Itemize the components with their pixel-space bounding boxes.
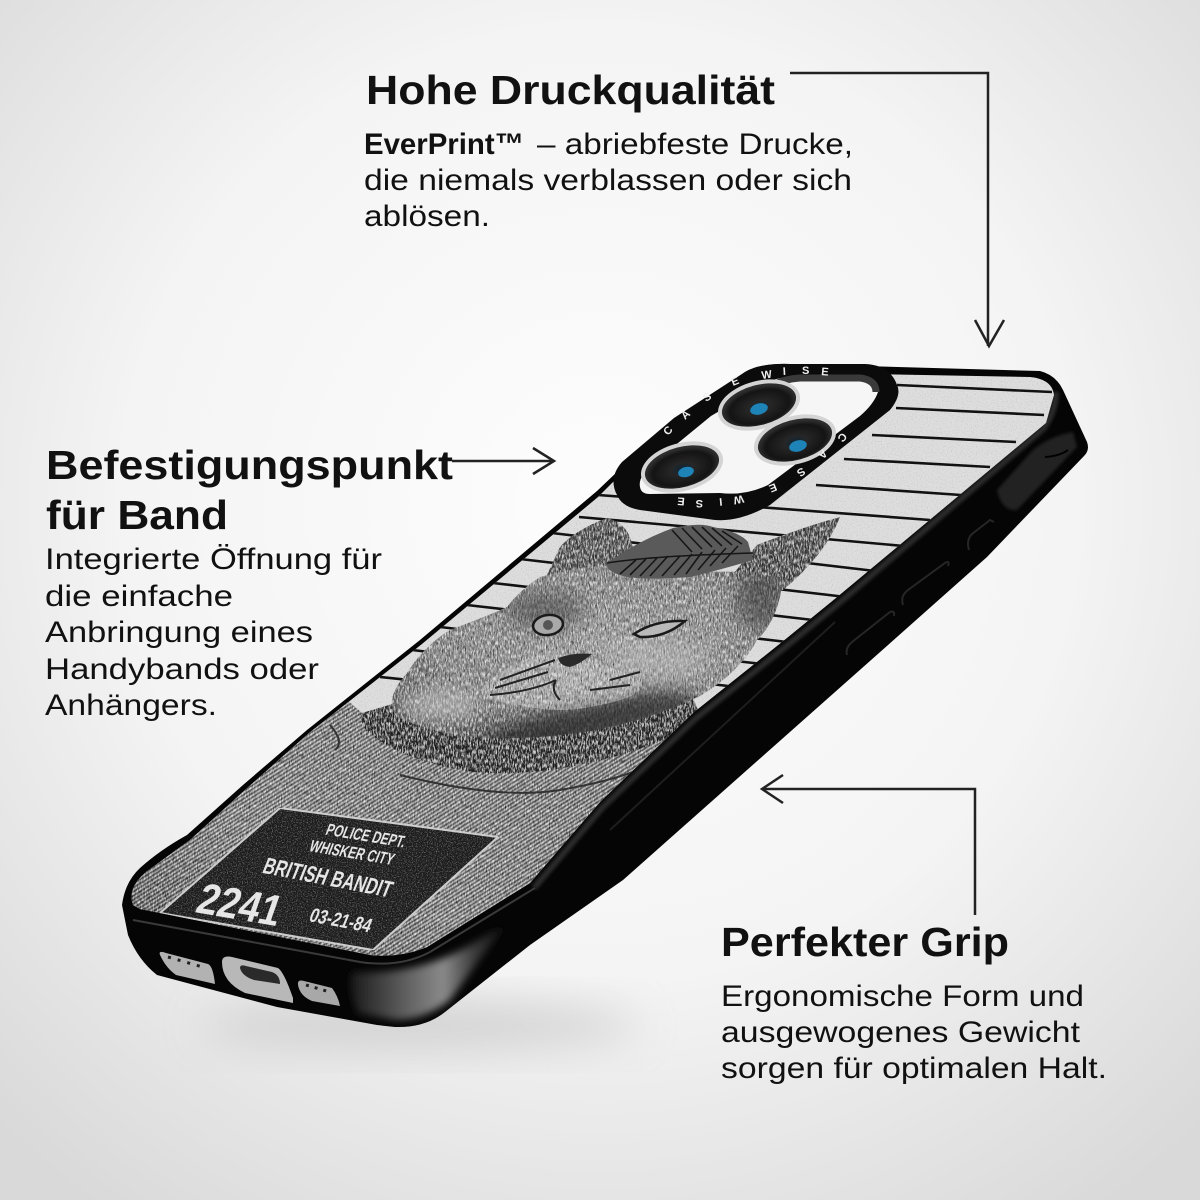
arrow: print quality [790, 73, 1004, 346]
cat eye right [634, 621, 685, 637]
cat ear left [546, 518, 632, 576]
side buttons [610, 520, 994, 830]
description: – abriebfeste Drucke, [537, 128, 853, 161]
heading: Befestigungspunkt [46, 442, 453, 488]
arrow: grip [762, 775, 975, 915]
case silhouette [122, 364, 1088, 1027]
side curve detail [1045, 450, 1068, 457]
charging port [222, 957, 293, 1003]
callout: print quality [364, 67, 853, 233]
name plaque: BRITISH BANDIT [259, 854, 397, 903]
callout: grip [721, 919, 1107, 1085]
name plaque [160, 808, 498, 950]
description [45, 543, 382, 722]
ring lettering bottom: CASEWISE [677, 430, 849, 509]
inner rim shadow [775, 378, 876, 392]
phone shadow [200, 1003, 640, 1047]
lens top [712, 371, 806, 439]
camera ring [613, 364, 898, 520]
arrow: strap attachment [452, 448, 554, 474]
description: Ergonomische Form und [721, 980, 1084, 1013]
name plaque: 2241 [191, 874, 289, 935]
lens left [635, 433, 729, 501]
paper background [120, 360, 1070, 970]
ring lettering top: CASEWISE [661, 365, 829, 438]
callout: strap attachment [45, 442, 453, 722]
heading [46, 442, 453, 538]
printed back [120, 360, 1070, 970]
speaker right [298, 980, 340, 1006]
camera island [613, 364, 898, 520]
rim highlight [133, 888, 535, 964]
head shading [393, 572, 783, 738]
sweater body [132, 702, 686, 956]
sweater neckline [329, 724, 632, 794]
cat ear right [734, 517, 840, 590]
name plaque: WHISKER CITY [306, 838, 397, 869]
description: Anbringung eines [45, 616, 313, 649]
cat hat [607, 525, 753, 578]
description: Handybands oder [45, 653, 319, 686]
cat eye left [532, 613, 564, 637]
description [364, 128, 853, 233]
cat mouth and whiskers [490, 660, 640, 700]
lens right [748, 406, 842, 474]
description: Integrierte Öffnung für [45, 543, 382, 576]
glossy bottom right corner [351, 925, 505, 1020]
heading: Hohe Druckqualität [366, 67, 775, 113]
description: die niemals verblassen oder sich [364, 164, 852, 197]
plaque text: POLICE DEPT. [323, 821, 409, 852]
heading: für Band [46, 492, 228, 538]
description: EverPrint™ [364, 128, 524, 161]
description: ausgewogenes Gewicht [721, 1016, 1081, 1049]
description: sorgen für optimalen Halt. [721, 1052, 1107, 1085]
cat muzzle [480, 654, 642, 710]
scarf collar [361, 699, 698, 774]
name plaque: 03-21-84 [306, 904, 376, 937]
description: Anhängers. [45, 689, 217, 722]
camera plate [640, 376, 878, 494]
side button near top right corner [997, 432, 1077, 510]
phone case [120, 360, 1088, 1027]
description: die einfache [45, 580, 233, 613]
prison stripes [380, 385, 1052, 712]
cat head [392, 566, 783, 738]
speaker left [160, 952, 215, 984]
rim along print edge [534, 392, 1056, 888]
description [721, 980, 1107, 1085]
description: ablösen. [364, 200, 490, 233]
cat nose [558, 654, 592, 667]
heading: Perfekter Grip [721, 919, 1009, 965]
